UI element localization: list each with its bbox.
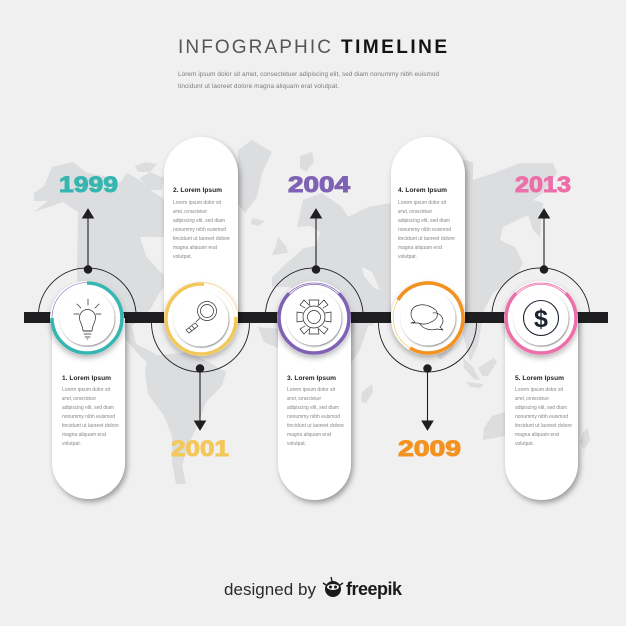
timeline bar bbox=[24, 312, 608, 323]
title bbox=[178, 37, 447, 58]
icon: dollar: $ bbox=[534, 305, 548, 333]
panel: step 1: magna aliquam erat bbox=[62, 432, 106, 438]
panel: step 3: Lorem ipsum dolor sit bbox=[287, 387, 335, 393]
connector arc and arrow: 2013 bbox=[492, 209, 590, 312]
panel: step 3: 3. Lorem Ipsum bbox=[287, 375, 336, 382]
connector arc and arrow: 2009 bbox=[378, 323, 476, 430]
panel: step 2: tincidunt ut laoreet dolore bbox=[173, 236, 230, 242]
icon: magnifier bbox=[186, 302, 216, 333]
title: TIMELINE bbox=[341, 37, 447, 58]
panel: step 3: tincidunt ut laoreet dolore bbox=[287, 423, 344, 429]
connector arc and arrow: 2004 bbox=[266, 209, 363, 312]
connector arc and arrow: 1999 bbox=[38, 209, 136, 312]
panel: step 1: volutpat. bbox=[62, 441, 81, 447]
panel: step 3: adipiscing elit, sed diam bbox=[287, 405, 339, 411]
panel: step 4: amet, consectetuer bbox=[398, 209, 432, 215]
node 2: magnifier bbox=[164, 282, 238, 356]
panel: step 3: volutpat. bbox=[287, 441, 306, 447]
intro text bbox=[178, 71, 439, 90]
credit: designed by freepik bbox=[224, 577, 403, 599]
panel: step 5: volutpat. bbox=[515, 441, 534, 447]
panel: step 2: magna aliquam erat bbox=[173, 245, 217, 251]
panel: step 1: nonummy nibh euismod bbox=[62, 414, 115, 420]
panel: step 3: magna aliquam erat bbox=[287, 432, 331, 438]
node 4: speech bubbles bbox=[391, 281, 465, 355]
node 1: lightbulb bbox=[50, 281, 124, 355]
icon: gear bbox=[297, 300, 331, 334]
panel: step 3 bbox=[278, 318, 351, 500]
connector arc and arrow: 2001 bbox=[152, 323, 250, 430]
node 3: gear bbox=[277, 281, 351, 355]
intro text: Lorem ipsum dolor sit amet, consectetuer adipiscing elit, sed diam nonummy nibh euismod bbox=[178, 71, 439, 78]
panel: step 3: amet, consectetuer bbox=[287, 396, 321, 402]
panel: step 5: Lorem ipsum dolor sit bbox=[515, 387, 563, 393]
icon: lightbulb bbox=[74, 299, 101, 339]
panel: step 5: amet, consectetuer bbox=[515, 396, 549, 402]
panel: step 2: nonummy nibh euismod bbox=[173, 227, 226, 233]
panel: step 2: amet, consectetuer bbox=[173, 209, 207, 215]
credit: designed by freepik: designed by bbox=[224, 580, 316, 599]
year 2001: 2001 bbox=[171, 436, 229, 461]
panel: step 2: volutpat. bbox=[173, 254, 192, 260]
panel: step 5: tincidunt ut laoreet dolore bbox=[515, 423, 572, 429]
panel: step 2: adipiscing elit, sed diam bbox=[173, 218, 225, 224]
panel: step 5 bbox=[505, 318, 578, 500]
panel: step 4: adipiscing elit, sed diam bbox=[398, 218, 450, 224]
title: INFOGRAPHIC bbox=[178, 37, 331, 58]
icon: freepik mascot bbox=[323, 577, 343, 597]
intro text: tincidunt ut laoreet dolore magna aliquam erat volutpat. bbox=[178, 83, 339, 90]
panel: step 2: 2. Lorem Ipsum bbox=[173, 187, 222, 194]
year 2009: 2009 bbox=[398, 436, 461, 461]
panel: step 1 bbox=[52, 318, 125, 499]
panel: step 4: nonummy nibh euismod bbox=[398, 227, 451, 233]
world map bbox=[34, 140, 590, 484]
panel: step 5: adipiscing elit, sed diam bbox=[515, 405, 567, 411]
panel: step 3: nonummy nibh euismod bbox=[287, 414, 340, 420]
year 1999: 1999 bbox=[59, 172, 118, 197]
panel: step 2 bbox=[164, 137, 238, 320]
panel: step 1: 1. Lorem Ipsum bbox=[62, 375, 111, 382]
panel: step 4: 4. Lorem Ipsum bbox=[398, 187, 447, 194]
panel: step 1: Lorem ipsum dolor sit bbox=[62, 387, 110, 393]
year 2004: 2004 bbox=[288, 172, 351, 197]
panel: step 4: magna aliquam erat bbox=[398, 245, 442, 251]
panel: step 5: nonummy nibh euismod bbox=[515, 414, 568, 420]
panel: step 5: magna aliquam erat bbox=[515, 432, 559, 438]
panel: step 5: 5. Lorem Ipsum bbox=[515, 375, 564, 382]
panel: step 2: Lorem ipsum dolor sit bbox=[173, 200, 221, 206]
panel: step 4: tincidunt ut laoreet dolore bbox=[398, 236, 455, 242]
panel: step 4 bbox=[391, 137, 465, 320]
node 5: dollar bbox=[504, 281, 578, 355]
panel: step 1: amet, consectetuer bbox=[62, 396, 96, 402]
panel: step 1: tincidunt ut laoreet dolore bbox=[62, 423, 119, 429]
panel: step 4: volutpat. bbox=[398, 254, 417, 260]
credit: designed by freepik: freepik bbox=[346, 579, 403, 599]
panel: step 1: adipiscing elit, sed diam bbox=[62, 405, 114, 411]
year 2013: 2013 bbox=[515, 172, 571, 197]
icon: speech bubbles bbox=[411, 305, 443, 330]
panel: step 4: Lorem ipsum dolor sit bbox=[398, 200, 446, 206]
